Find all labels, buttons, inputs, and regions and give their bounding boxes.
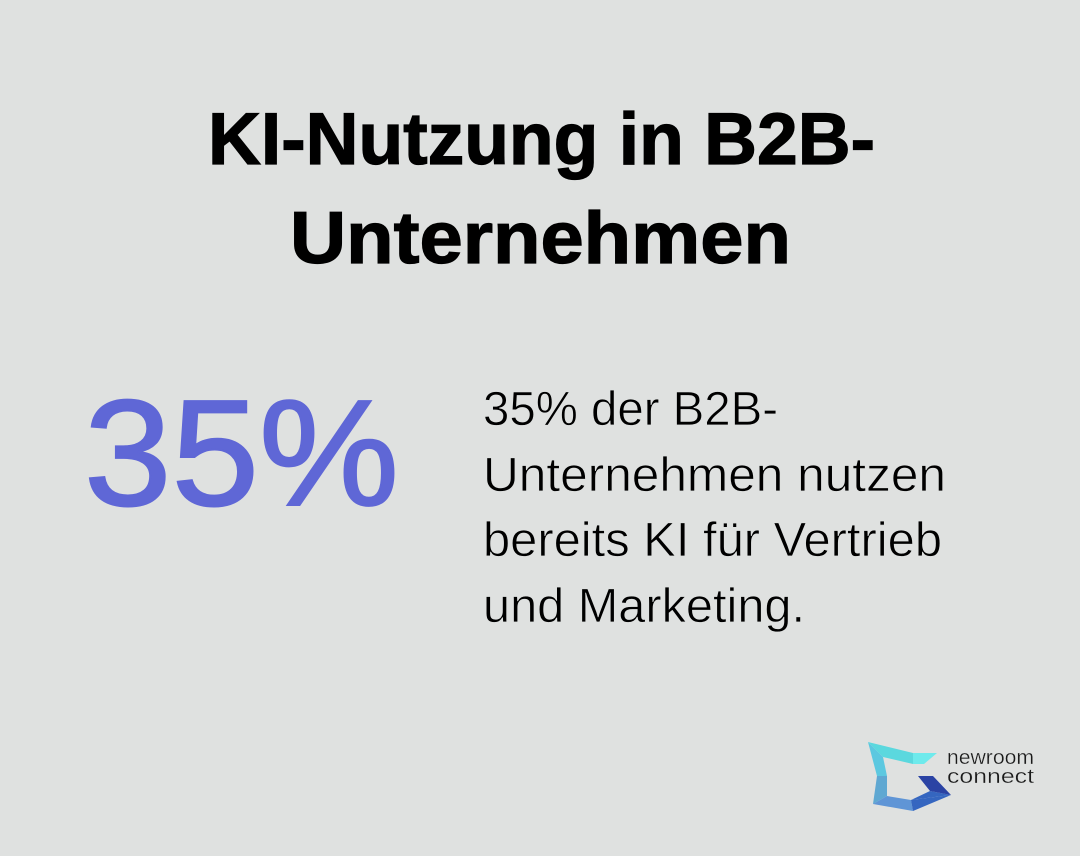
- logo wordmark: newroom: [947, 747, 1034, 769]
- description text: [483, 383, 946, 633]
- logo: newroom connect: [868, 742, 1035, 811]
- title: [208, 99, 875, 279]
- title: Unternehmen: [290, 198, 791, 279]
- description text: und Marketing.: [483, 580, 805, 633]
- description text: bereits KI für Vertrieb: [483, 514, 942, 567]
- title: KI-Nutzung in B2B-: [208, 99, 875, 180]
- icon: logo mark: [868, 742, 951, 811]
- logo wordmark: connect: [947, 766, 1035, 788]
- logo wordmark: [947, 747, 1035, 788]
- description text: 35% der B2B-: [483, 383, 778, 436]
- big statistic: 35%: 35%: [84, 368, 399, 537]
- description text: Unternehmen nutzen: [483, 449, 946, 502]
